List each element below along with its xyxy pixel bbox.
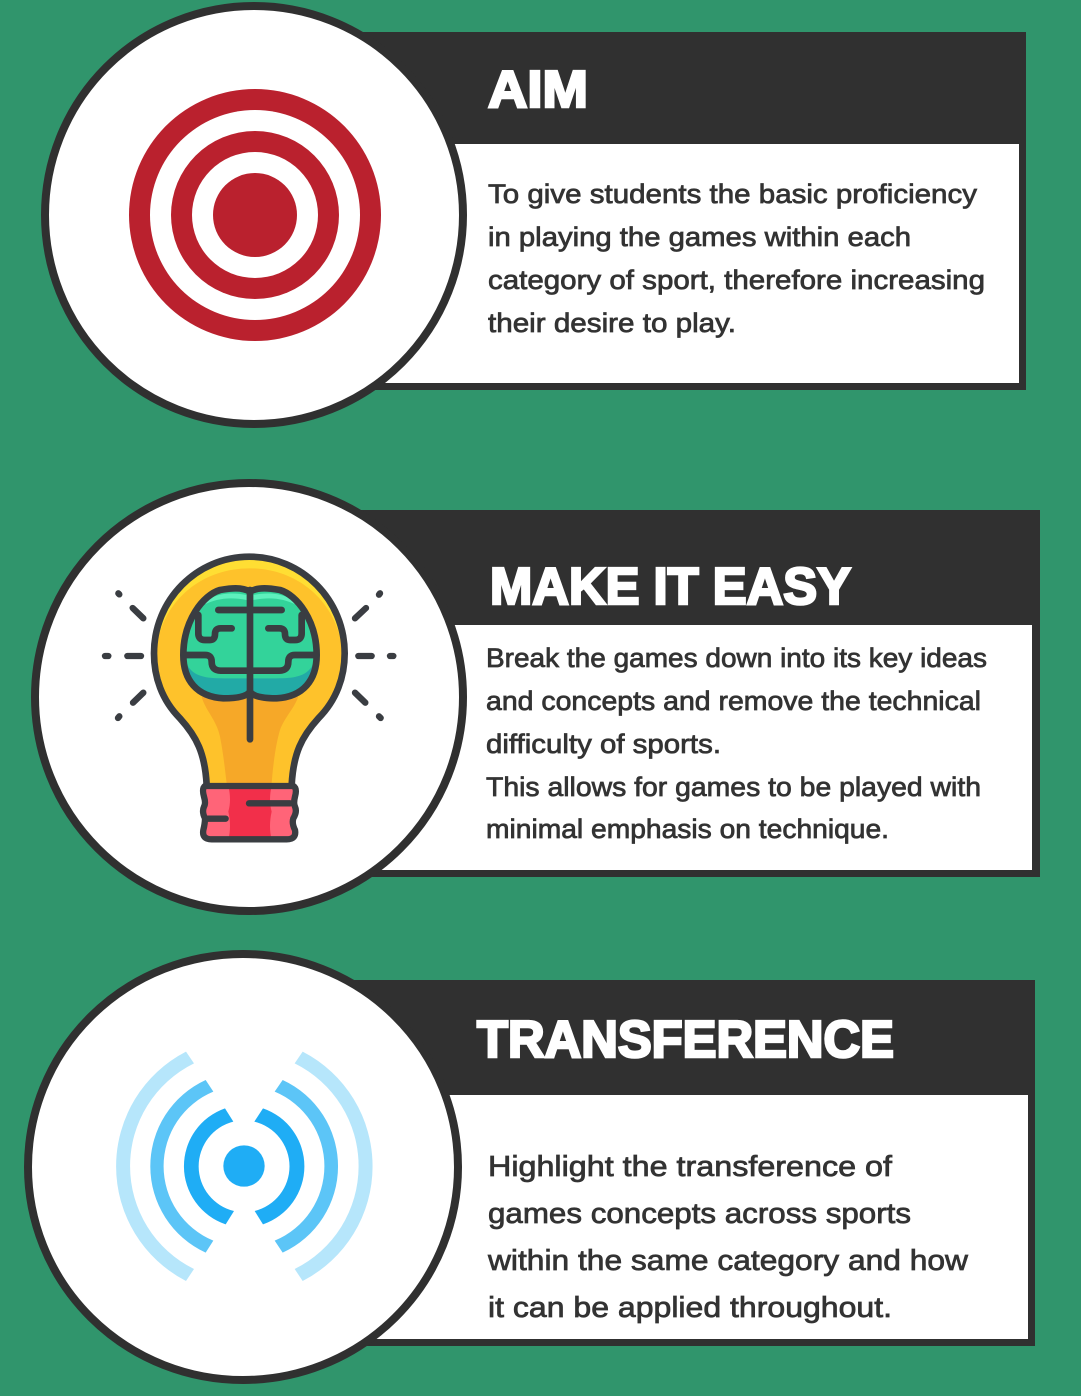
- text block: transference: Highlight the transference of: [488, 1151, 893, 1183]
- panel: make it easy: [35, 483, 1040, 911]
- text block: make it easy: [486, 643, 987, 844]
- text block: transference: [487, 1151, 969, 1324]
- text block: make it easy: minimal emphasis on technique.: [486, 814, 889, 844]
- light rays: [105, 593, 393, 718]
- text block: make it easy: difficulty of sports.: [486, 729, 721, 759]
- text block: aim: their desire to play.: [488, 308, 736, 338]
- bulb glass: [154, 557, 345, 785]
- text block: aim: To give students the basic proficiency: [488, 179, 978, 209]
- heading: aim: AIM: [488, 61, 588, 119]
- icon: signal waves: [116, 1052, 373, 1281]
- panel body: aim: [300, 144, 1019, 383]
- text block: make it easy: Break the games down into its key ideas: [486, 643, 987, 673]
- text block: make it easy: This allows for games to be played with: [486, 772, 981, 802]
- heading: transference: TRANSFERENCE: [477, 1011, 894, 1069]
- text block: aim: [488, 179, 985, 338]
- heading: make it easy: MAKE IT EASY: [490, 558, 851, 616]
- icon circle: aim: [45, 6, 463, 424]
- panel: transference: [28, 954, 1035, 1380]
- bulb base: [203, 786, 296, 839]
- text block: transference: it can be applied throughout.: [488, 1292, 892, 1324]
- text block: aim: category of sport, therefore increasing: [488, 265, 985, 295]
- brain: [183, 588, 317, 698]
- panel frame: aim: [300, 32, 1026, 390]
- text block: make it easy: and concepts and remove the technical: [486, 686, 981, 716]
- icon circle: transference: [28, 954, 458, 1380]
- icon: target: [129, 89, 381, 341]
- text block: transference: games concepts across sports: [488, 1198, 911, 1230]
- panel body: transference: [300, 1095, 1028, 1339]
- panel body: make it easy: [300, 625, 1032, 870]
- text block: aim: in playing the games within each: [488, 222, 911, 252]
- panel frame: transference: [300, 980, 1035, 1346]
- text block: transference: within the same category and how: [487, 1245, 969, 1277]
- icon: light bulb with brain: [105, 557, 393, 839]
- icon circle: make it easy: [35, 483, 463, 911]
- panel frame: make it easy: [300, 510, 1040, 877]
- panel: aim: [45, 6, 1026, 424]
